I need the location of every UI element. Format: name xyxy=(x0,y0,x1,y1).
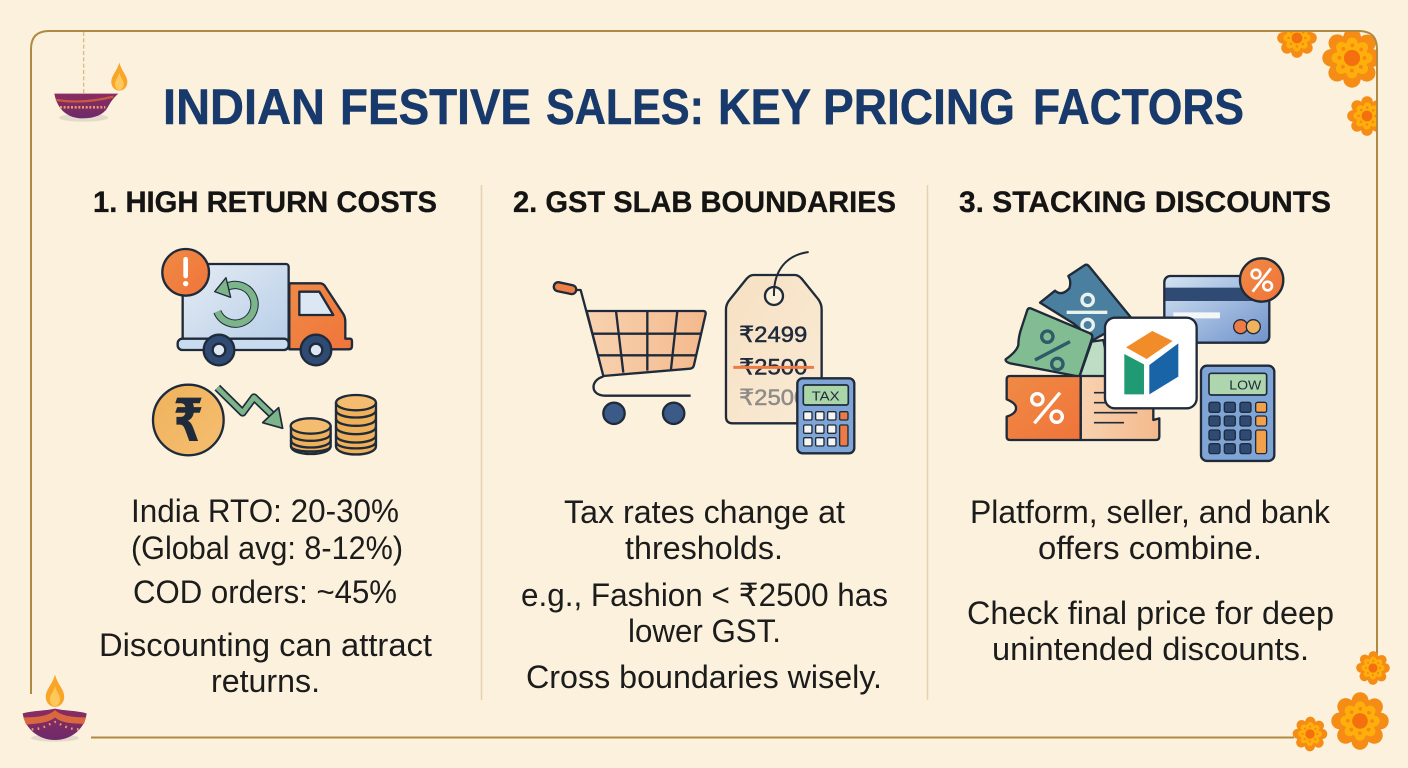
title xyxy=(163,79,1244,135)
icon: hanging diya top left xyxy=(54,32,127,122)
text: offers line two: offers combine. xyxy=(1038,530,1262,566)
panel: GST slab boundaries xyxy=(513,186,896,695)
text: discounting line one: Discounting can attract xyxy=(99,627,432,663)
text: global average: (Global avg: 8-12%) xyxy=(131,530,403,566)
title: KEY xyxy=(718,79,811,135)
icon: shopping cart xyxy=(553,281,706,424)
icon: marigold lower right small xyxy=(1360,655,1386,681)
icon: price tag with tax calculator: TAX xyxy=(812,389,840,404)
icon: bank card with percent badge xyxy=(1164,258,1283,343)
text: check price line two: unintended discounts. xyxy=(992,631,1309,667)
heading: GST slab boundaries: 2. GST SLAB BOUNDARIES xyxy=(513,186,896,219)
text: fashion example line two: lower GST. xyxy=(628,613,781,649)
icon: marigold lower right large xyxy=(1337,698,1383,744)
title: SALES: xyxy=(546,79,704,135)
icon: cube logo tile xyxy=(1105,318,1197,408)
icon: diya bottom left xyxy=(23,675,87,742)
column dividers xyxy=(482,185,928,700)
text: cross boundaries: Cross boundaries wisely. xyxy=(526,659,882,695)
icon: price tag with tax calculator: ₹2500 xyxy=(739,385,807,410)
icon: low price calculator: LOW xyxy=(1229,377,1262,392)
title: PRICING xyxy=(823,79,1015,135)
icon: marigold top left of corner xyxy=(1281,22,1313,54)
panel: stacking discounts xyxy=(959,186,1334,667)
text: return rate: India RTO: 20-30% xyxy=(131,493,399,529)
icon: marigold bottom xyxy=(1296,720,1324,748)
text: discounting line two: returns. xyxy=(211,663,320,699)
heading: stacking discounts: 3. STACKING DISCOUNTS xyxy=(959,186,1331,219)
icon: rupee coin, falling arrow and coin stacks xyxy=(153,385,376,455)
icon: price tag with tax calculator: ₹2499 xyxy=(739,322,807,347)
icon: stacked coupons xyxy=(1006,265,1159,440)
title: INDIAN xyxy=(163,79,325,135)
text: tax rates line one: Tax rates change at xyxy=(564,494,845,530)
text: check price line one: Check final price for deep xyxy=(967,595,1334,631)
icon: return truck xyxy=(162,249,352,365)
icon: price tag with tax calculator xyxy=(726,252,854,453)
text: COD orders: COD orders: ~45% xyxy=(133,574,397,610)
icon: low price calculator xyxy=(1201,366,1274,461)
icon: rupee coin, falling arrow and coin stacks: ₹ xyxy=(173,389,204,455)
text: fashion example line one: e.g., Fashion < ₹2500 has xyxy=(521,577,888,613)
panel: high return costs xyxy=(93,186,437,699)
title: FACTORS xyxy=(1033,79,1244,135)
icon: marigold large top right xyxy=(1329,35,1375,81)
text: offers line one: Platform, seller, and bank xyxy=(970,494,1331,530)
text: tax rates line two: thresholds. xyxy=(625,530,783,566)
icon: price tag with tax calculator: ₹2500 xyxy=(739,354,807,379)
heading: high return costs: 1. HIGH RETURN COSTS xyxy=(93,186,437,219)
title: FESTIVE xyxy=(340,79,531,135)
icon: marigold right edge xyxy=(1351,100,1383,132)
